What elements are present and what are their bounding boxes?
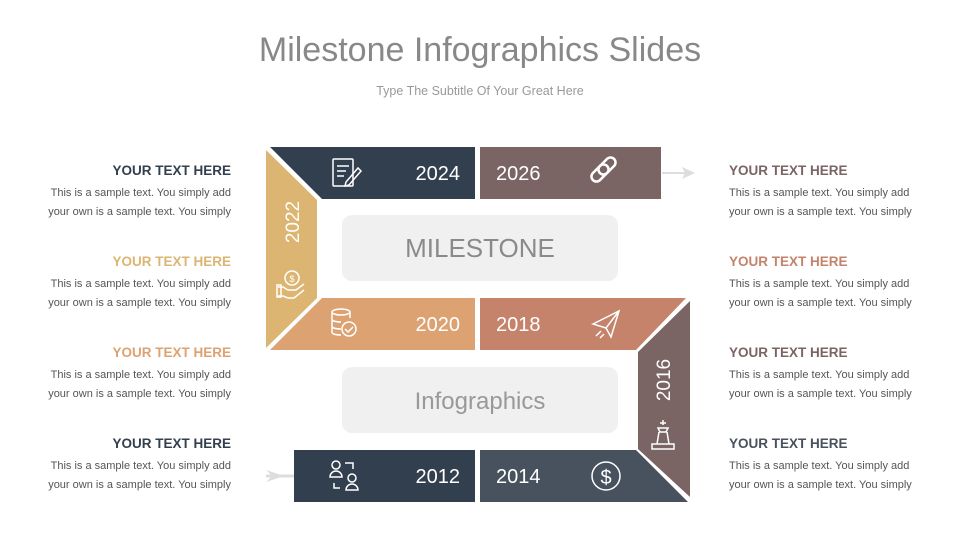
icon: users exchange: [330, 461, 358, 490]
text block: right 2: [729, 254, 912, 309]
segment 2020: [270, 298, 475, 350]
text block: right 1: YOUR TEXT HERE: [729, 163, 848, 178]
icon: chess piece: [652, 420, 674, 449]
text block: right 4: This is a sample text. You simply add: [729, 460, 909, 472]
icon: dollar: [592, 462, 620, 490]
icon: document edit: [333, 159, 361, 186]
text block: left 2: This is a sample text. You simply add: [51, 278, 231, 290]
segment 2020: 2020: [416, 314, 460, 336]
panel: infographics: Infographics: [415, 388, 545, 415]
text block: right 3: [729, 345, 912, 400]
panel: milestone: [342, 215, 618, 281]
text block: right 1: [729, 163, 912, 218]
icon: dollar: $: [600, 467, 612, 489]
text block: left 2: [48, 254, 231, 309]
text block: right 2: your own is a sample text. You simply: [729, 297, 912, 309]
text block: right 3: This is a sample text. You simply add: [729, 369, 909, 381]
text block: right 4: your own is a sample text. You simply: [729, 479, 912, 491]
text block: right 4: YOUR TEXT HERE: [729, 436, 848, 451]
icon: link: [589, 155, 618, 184]
text block: right 2: This is a sample text. You simply add: [729, 278, 909, 290]
segment 2014: 2014: [496, 466, 540, 488]
segment 2026: [480, 147, 661, 199]
text block: left 2: your own is a sample text. You simply: [48, 297, 231, 309]
text block: right 3: your own is a sample text. You simply: [729, 388, 912, 400]
text block: left 1: This is a sample text. You simply add: [51, 187, 231, 199]
text block: left 3: YOUR TEXT HERE: [112, 345, 231, 360]
text block: left 4: your own is a sample text. You simply: [48, 479, 231, 491]
text block: left 1: [48, 163, 231, 218]
text block: left 3: [48, 345, 231, 400]
segment 2012: 2012: [416, 466, 460, 488]
text block: left 3: This is a sample text. You simply add: [51, 369, 231, 381]
text block: left 3: your own is a sample text. You simply: [48, 388, 231, 400]
text block: right 1: your own is a sample text. You simply: [729, 206, 912, 218]
icon: hand coin: [277, 271, 304, 298]
title: Milestone Infographics Slides: [259, 31, 701, 69]
segment 2016: [638, 301, 690, 497]
segment 2022: [266, 150, 317, 348]
arrow: in: [266, 470, 294, 482]
text block: left 1: YOUR TEXT HERE: [112, 163, 231, 178]
text block: right 2: YOUR TEXT HERE: [729, 254, 848, 269]
segment 2024: [270, 147, 475, 199]
segment 2022: 2022: [283, 201, 304, 243]
panel: infographics: [342, 367, 618, 433]
text block: right 4: [729, 436, 912, 491]
segment 2014: [480, 450, 688, 502]
text block: left 4: YOUR TEXT HERE: [112, 436, 231, 451]
text block: left 2: YOUR TEXT HERE: [112, 254, 231, 269]
segment 2012: [294, 450, 475, 502]
subtitle: Type The Subtitle Of Your Great Here: [376, 84, 584, 98]
icon: hand coin: $: [289, 274, 295, 284]
text block: left 1: your own is a sample text. You simply: [48, 206, 231, 218]
icon: database check: [332, 309, 356, 336]
text block: left 4: This is a sample text. You simply add: [51, 460, 231, 472]
segment 2018: [480, 298, 686, 350]
text block: right 3: YOUR TEXT HERE: [729, 345, 848, 360]
arrow: out: [662, 167, 695, 179]
segment 2026: 2026: [496, 163, 540, 185]
text block: left 4: [48, 436, 231, 491]
panel: milestone: MILESTONE: [405, 233, 555, 263]
segment 2024: 2024: [416, 163, 460, 185]
segment 2018: 2018: [496, 314, 540, 336]
text block: right 1: This is a sample text. You simply add: [729, 187, 909, 199]
icon: paper plane: [593, 311, 619, 338]
segment 2016: 2016: [654, 359, 675, 401]
